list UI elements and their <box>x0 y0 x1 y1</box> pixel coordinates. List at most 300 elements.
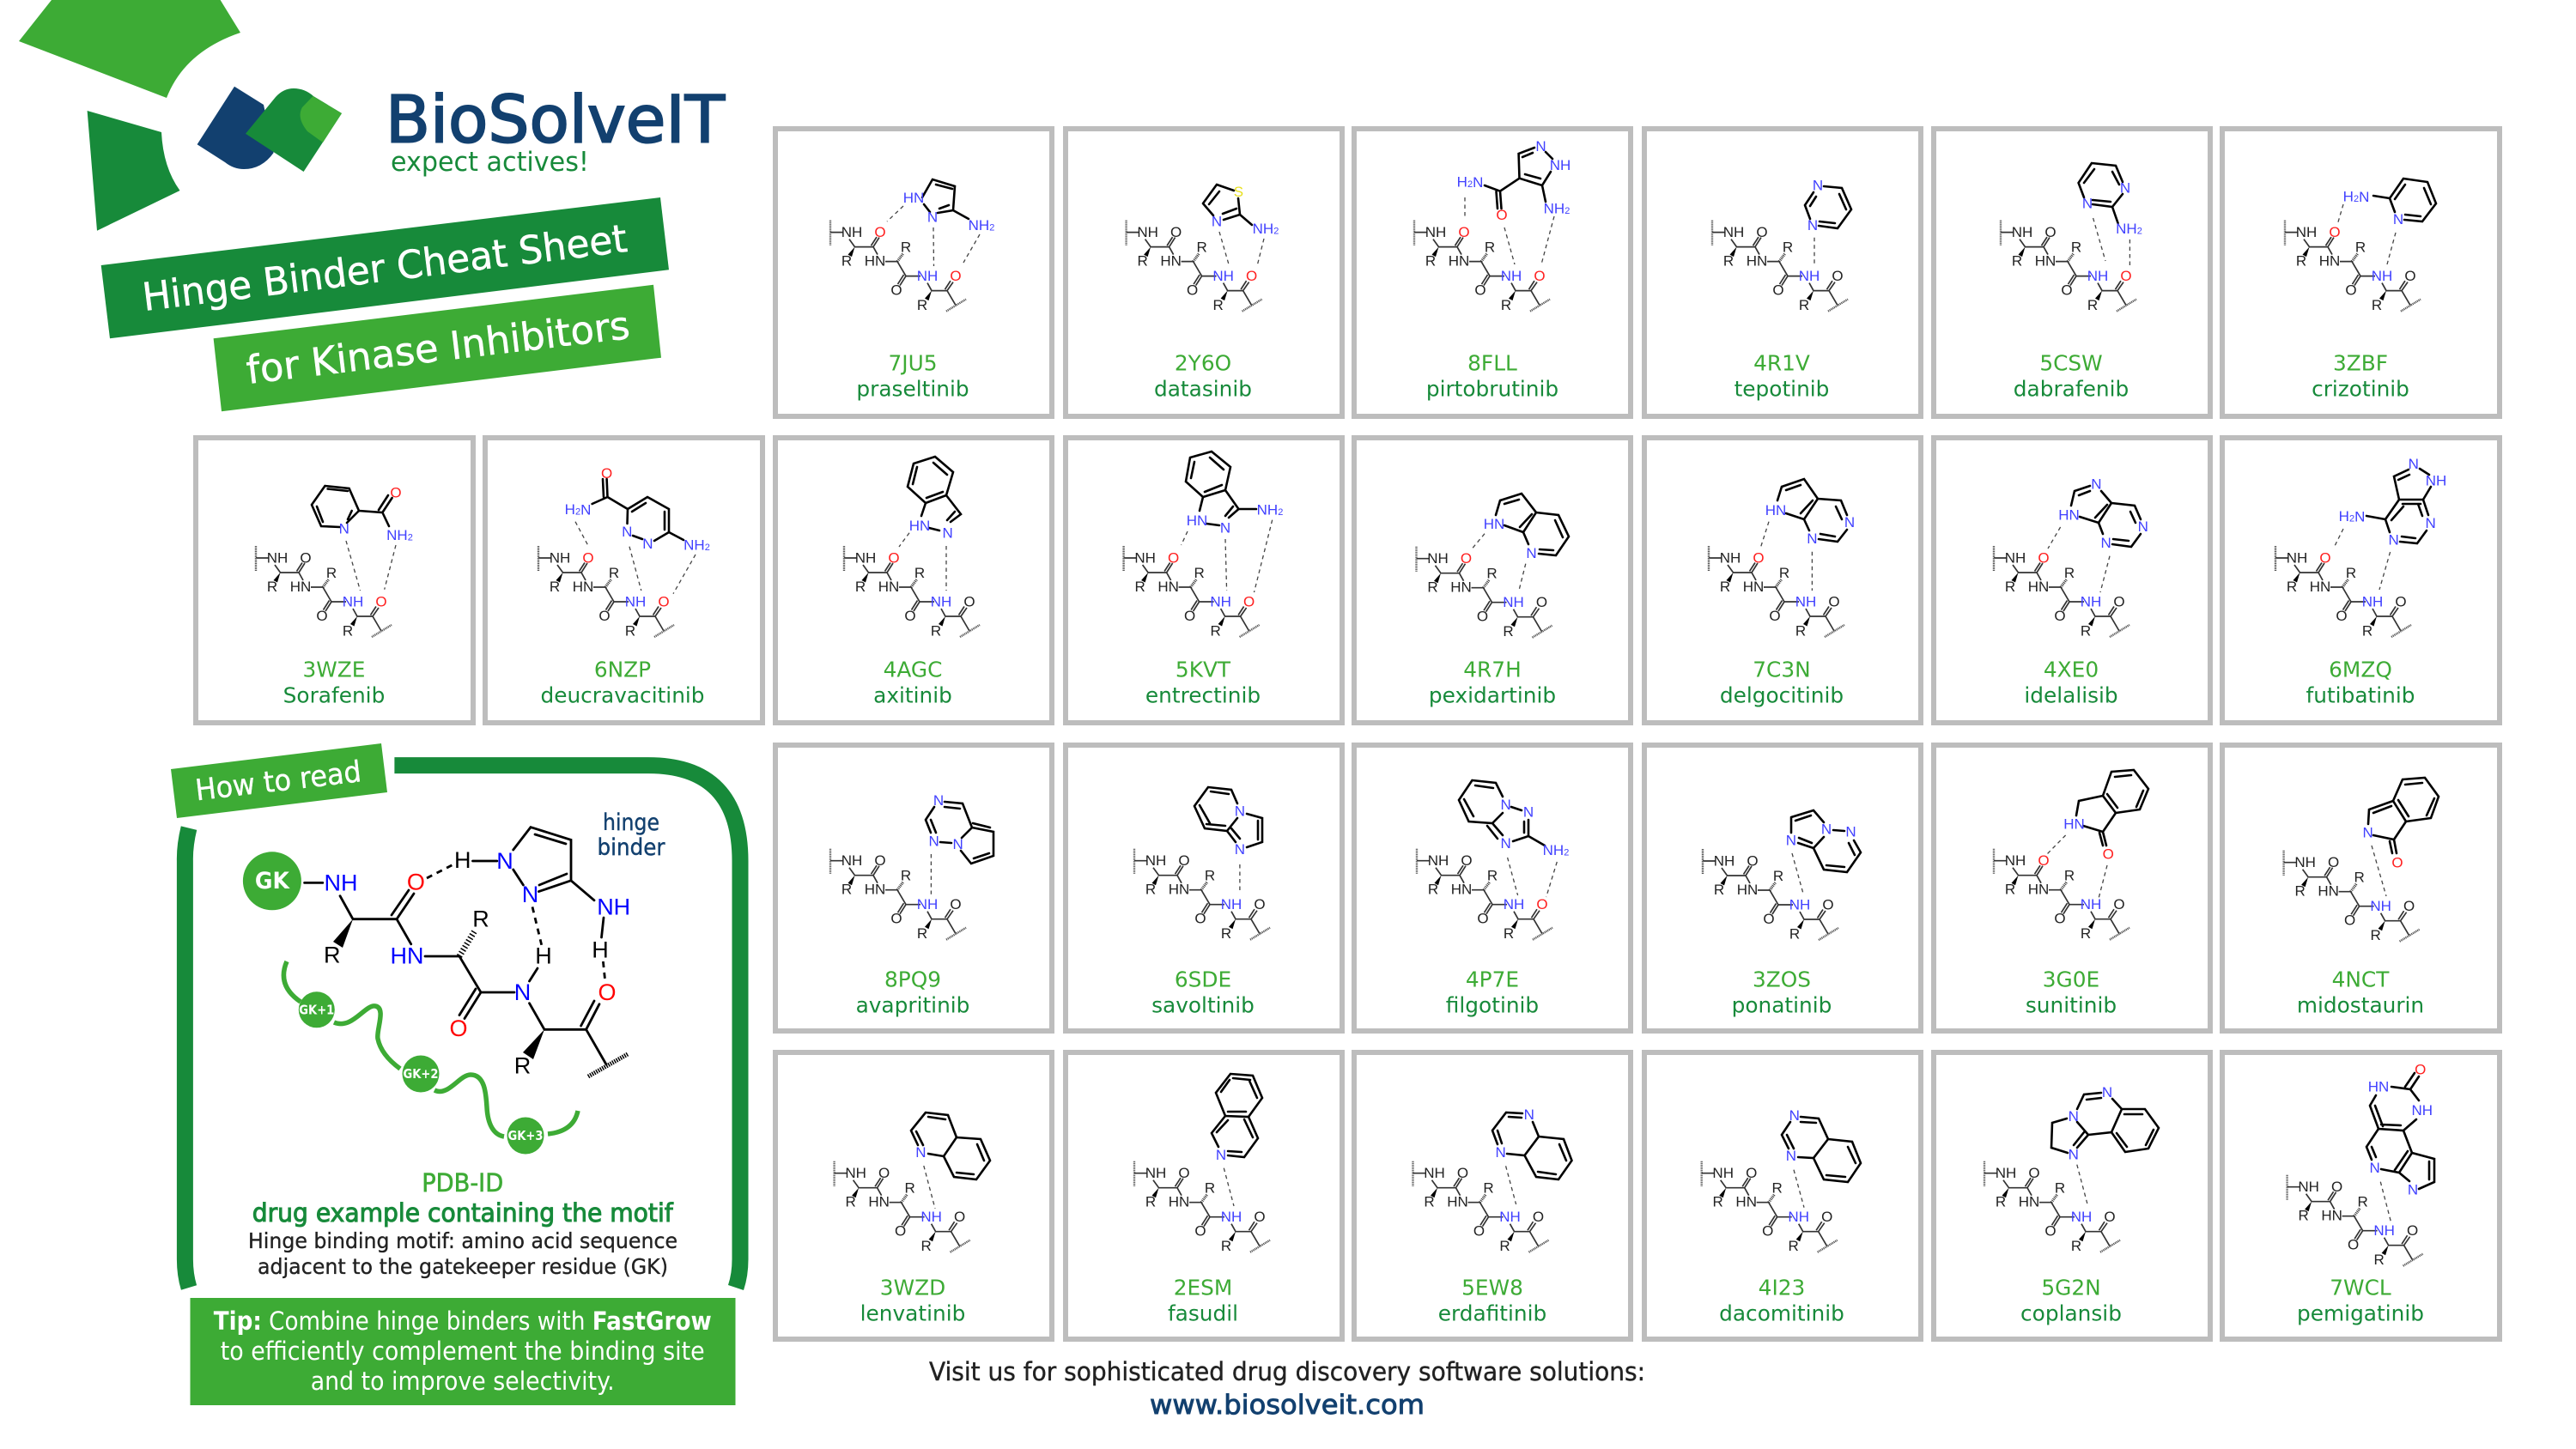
chemical structure: R <box>1996 1194 2006 1210</box>
chemical structure: R <box>609 565 619 581</box>
chemical structure: O <box>2331 1179 2342 1195</box>
chemical structure: R <box>1483 1180 1494 1197</box>
title banner: Hinge Binder Cheat Sheet: Hinge Binder Cheat Sheet <box>140 215 629 320</box>
chemical structure: H <box>2339 508 2349 524</box>
chart: binding motif chemical structure: R <box>324 943 340 968</box>
chemical structure: NH <box>1723 224 1744 240</box>
chemical structure: O <box>598 608 611 624</box>
chemical structure: HN <box>2310 579 2330 595</box>
chemical structure: O <box>1243 594 1255 609</box>
chemical structure: O <box>890 282 902 299</box>
chemical structure: O <box>2319 549 2331 567</box>
chemical structure: O <box>954 1209 965 1225</box>
label: PDB ID: 8PQ9 <box>884 967 941 991</box>
chemical structure: O <box>1178 852 1190 869</box>
chemical structure <box>844 457 980 639</box>
chemical structure: O <box>2329 224 2341 240</box>
label: PDB ID: 3WZE <box>303 657 365 682</box>
panel: 5EW8 erdafitinib <box>1354 1052 1631 1339</box>
label: PDB ID: 5EW8 <box>1461 1275 1523 1300</box>
label: drug name: delgocitinib <box>1720 682 1844 707</box>
chemical structure: O <box>950 896 962 912</box>
chemical structure: NH <box>1425 224 1446 240</box>
label: drug name: dabrafenib <box>2014 377 2129 402</box>
chemical structure: HN <box>1187 512 1207 529</box>
panel: 7JU5 praseltinib <box>775 129 1052 416</box>
chemical structure: R <box>1145 882 1156 898</box>
chemical structure: NH <box>2373 1222 2395 1239</box>
chart: residue chain GK+1 to GK+3: GK+3 <box>508 1128 543 1143</box>
chemical structure: O <box>2407 1222 2418 1239</box>
chemical structure: N <box>1524 1106 1534 1123</box>
chemical structure: NH <box>1550 157 1571 173</box>
chemical structure: N <box>1821 821 1832 838</box>
chemical structure: R <box>1210 623 1221 639</box>
icon: gatekeeper residue GK <box>243 852 301 910</box>
chemical structure: O <box>2415 1061 2426 1078</box>
text block: motif definition: adjacent to the gatekeeper residue (GK) <box>258 1254 668 1279</box>
chemical structure: O <box>1753 549 1765 567</box>
label: drug name: pemigatinib <box>2297 1300 2424 1325</box>
panel: 7C3N delgocitinib <box>1644 438 1921 723</box>
chemical structure: O <box>1254 1209 1266 1225</box>
chemical structure: NH <box>2298 1179 2319 1195</box>
label: PDB ID: 4I23 <box>1759 1275 1805 1300</box>
chemical structure: NH <box>1427 550 1449 567</box>
chemical structure: R <box>1504 925 1514 942</box>
chemical structure: O <box>1474 282 1486 299</box>
chemical structure <box>2285 179 2436 313</box>
label: hinge binder: hinge <box>603 809 659 836</box>
chemical structure: H <box>2343 189 2354 204</box>
chemical structure: NH <box>920 1209 942 1225</box>
chemical structure <box>1702 1107 1861 1254</box>
label: PDB ID: 4P7E <box>1466 967 1519 991</box>
chemical structure: O <box>1828 594 1840 609</box>
chemical structure: O <box>2404 268 2416 284</box>
chart: binding motif chemical structure: O <box>407 869 425 894</box>
chemical structure: O <box>1254 896 1266 912</box>
title banner: Hinge Binder Cheat Sheet <box>101 197 669 338</box>
chemical structure: NH <box>969 217 989 233</box>
chart: binding motif chemical structure <box>305 828 630 1079</box>
chemical structure: R <box>1427 579 1438 596</box>
heading: how to read <box>171 743 387 818</box>
chemical structure: O <box>1821 1209 1832 1225</box>
chemical structure: O <box>1194 911 1206 927</box>
chemical structure: N <box>2393 211 2403 227</box>
chemical structure: NH <box>2287 549 2307 567</box>
chart: binding motif chemical structure: R <box>472 906 489 932</box>
chemical structure: N <box>1235 841 1245 858</box>
chemical structure: N <box>1786 833 1796 848</box>
panel: 3ZBF crizotinib <box>2222 129 2500 416</box>
chemical structure: 2 <box>1273 227 1279 237</box>
chemical structure: NH <box>2012 224 2032 240</box>
chemical structure: O <box>2044 224 2057 240</box>
chemical structure <box>1417 780 1569 942</box>
chart: binding motif chemical structure: NH <box>325 870 357 895</box>
panel: 3WZE Sorafenib <box>196 438 473 723</box>
chart: residue chain GK+1 to GK+3 <box>283 961 578 1154</box>
legend text: PDB-ID: PDB-ID <box>422 1168 503 1197</box>
chemical structure: O <box>895 1223 906 1240</box>
chemical structure: O <box>300 549 312 567</box>
logo wordmark: BioSolveIT <box>386 82 726 158</box>
callout: tip: Tip: Combine hinge binders with FastGrow <box>214 1307 712 1336</box>
chemical structure: S <box>1234 184 1243 200</box>
chemical structure: R <box>2370 927 2381 943</box>
label: drug name: datasinib <box>1154 377 1252 402</box>
chart: residue chain GK+1 to GK+3: GK+1 <box>299 1002 334 1017</box>
chemical structure: O <box>2028 1165 2040 1181</box>
chemical structure: HN <box>1449 253 1469 270</box>
chemical structure: HN <box>868 1194 890 1210</box>
chemical structure: NH <box>1795 594 1816 609</box>
chemical structure: NH <box>550 549 570 567</box>
chemical structure: N <box>1216 1147 1226 1163</box>
chemical structure: O <box>1747 853 1759 869</box>
chemical structure: O <box>2113 896 2125 912</box>
chemical structure: HN <box>2318 883 2339 900</box>
chemical structure: R <box>2354 870 2365 886</box>
panel: 4AGC axitinib <box>775 438 1052 723</box>
chemical structure: O <box>1457 1165 1468 1181</box>
label: drug name: Sorafenib <box>283 682 385 707</box>
chemical structure: HN <box>2321 1208 2342 1224</box>
chemical structure <box>830 792 993 942</box>
panel: 4I23 dacomitinib <box>1644 1052 1921 1339</box>
chart: binding motif chemical structure: N <box>522 882 538 907</box>
chemical structure: R <box>2373 1252 2385 1268</box>
chemical structure: R <box>2064 565 2075 581</box>
chemical structure <box>1984 1084 2159 1254</box>
chemical structure: N <box>2069 1108 2079 1125</box>
chemical structure: HN <box>1737 882 1758 898</box>
label: drug name: tepotinib <box>1735 377 1829 402</box>
chemical structure: O <box>2348 1237 2359 1253</box>
chemical structure: O <box>2345 282 2357 299</box>
chemical structure: NH <box>267 549 288 567</box>
chemical structure: HN <box>2368 1078 2389 1095</box>
chemical structure <box>1127 184 1279 313</box>
panel: 3ZOS ponatinib <box>1644 745 1921 1031</box>
panel: 3G0E sunitinib <box>1934 745 2210 1031</box>
chemical structure: NH <box>1720 549 1741 567</box>
chemical structure: N <box>1807 530 1818 547</box>
chemical structure: O <box>1763 911 1775 927</box>
panel: 7WCL pemigatinib <box>2222 1052 2500 1339</box>
label: hinge binder <box>598 809 665 861</box>
chemical structure: O <box>874 852 886 869</box>
chemical structure: N <box>2370 1160 2380 1176</box>
chemical structure: O <box>888 549 900 567</box>
chemical structure: O <box>2113 594 2125 609</box>
chart: binding motif chemical structure: N <box>496 848 513 874</box>
chemical structure <box>1709 479 1855 639</box>
chemical structure: NH <box>1544 201 1564 216</box>
chemical structure: R <box>1487 868 1498 884</box>
chemical structure: O <box>375 594 387 609</box>
label: drug name: pirtobrutinib <box>1426 377 1558 402</box>
chemical structure: NH <box>1212 268 1234 284</box>
chemical structure: R <box>904 1180 915 1197</box>
panel: 4R7H pexidartinib <box>1354 438 1631 723</box>
chemical structure: N <box>2409 456 2419 472</box>
chemical structure: O <box>1168 549 1179 567</box>
chemical structure <box>2287 1061 2434 1268</box>
chemical structure: NH <box>1221 896 1242 912</box>
chemical structure: N <box>2101 535 2111 551</box>
chart: binding motif chemical structure: O <box>598 979 617 1005</box>
chemical structure: NH <box>1714 853 1735 869</box>
chemical structure: O <box>2120 268 2132 284</box>
chemical structure: R <box>917 925 927 942</box>
panel: 5G2N coplansib <box>1934 1052 2210 1339</box>
chemical structure: HN <box>2035 253 2056 270</box>
chemical structure: HN <box>865 253 885 270</box>
chemical structure: R <box>550 579 560 595</box>
panel: 8PQ9 avapritinib <box>775 745 1052 1031</box>
label: PDB ID: 7WCL <box>2330 1275 2391 1300</box>
chemical structure: NH <box>1210 594 1231 609</box>
chemical structure: R <box>1196 239 1207 256</box>
chemical structure: NH <box>1134 549 1156 567</box>
label: PDB ID: 4XE0 <box>2044 657 2099 682</box>
chemical structure: 2 <box>2354 194 2359 204</box>
label: drug name: ponatinib <box>1732 992 1832 1017</box>
label: PDB ID: 4R7H <box>1463 657 1522 682</box>
chemical structure: 2 <box>2137 227 2142 237</box>
chemical structure: N <box>2354 508 2365 524</box>
chemical structure: HN <box>909 518 930 534</box>
panel: 4P7E filgotinib <box>1354 745 1631 1031</box>
chemical structure: O <box>1473 1223 1485 1240</box>
chemical structure: O <box>2054 608 2066 624</box>
chemical structure: HN <box>1484 516 1504 532</box>
chemical structure: NH <box>917 268 938 284</box>
chemical structure: NH <box>2005 549 2026 567</box>
title banner: for Kinase Inhibitors: for Kinase Inhibitors <box>244 302 632 393</box>
chemical structure: R <box>2346 565 2356 581</box>
chemical structure: R <box>1134 579 1145 595</box>
heading: how to read: How to read <box>193 755 363 808</box>
chemical structure: R <box>2355 239 2366 256</box>
chemical structure: NH <box>1253 221 1273 237</box>
chemical structure: N <box>580 501 591 518</box>
chemical structure: N <box>2091 476 2102 493</box>
chemical structure: R <box>917 297 927 313</box>
chemical structure: 2 <box>705 543 710 553</box>
chart: binding motif chemical structure: N <box>514 979 531 1005</box>
icon: BioSolveIT logo mark <box>197 87 342 172</box>
chemical structure: O <box>2061 282 2073 299</box>
chemical structure: R <box>326 565 337 581</box>
chemical structure: O <box>601 465 612 482</box>
chemical structure: N <box>2102 1084 2112 1100</box>
chemical structure: R <box>2287 579 2297 595</box>
chemical structure: O <box>1461 550 1472 567</box>
chemical structure: O <box>1746 1165 1757 1181</box>
chemical structure <box>1417 494 1569 640</box>
chart: residue chain GK+1 to GK+3: GK+2 <box>404 1066 438 1082</box>
chemical structure: O <box>1762 1223 1773 1240</box>
chemical structure: NH <box>1257 501 1278 518</box>
icon: gatekeeper residue GK: GK <box>255 868 290 894</box>
chemical structure <box>1994 476 2148 639</box>
label: drug name: idelalisib <box>2024 682 2118 707</box>
chemical structure: NH <box>1137 224 1158 240</box>
chemical structure: H <box>1457 173 1467 191</box>
label: drug name: deucravacitinib <box>540 682 705 707</box>
panel: 5KVT entrectinib <box>1066 438 1342 723</box>
label: PDB ID: 2Y6O <box>1175 351 1231 376</box>
chemical structure: N <box>1807 217 1818 233</box>
chemical structure: NH <box>1424 1165 1445 1181</box>
chart: binding motif chemical structure: O <box>449 1016 468 1041</box>
chemical structure: R <box>2296 253 2306 270</box>
chemical structure: N <box>942 525 953 541</box>
chemical structure: N <box>952 836 963 852</box>
chemical structure <box>1134 1074 1270 1254</box>
chemical structure: R <box>841 253 852 270</box>
label: PDB ID: 4NCT <box>2332 967 2390 991</box>
label: drug name: crizotinib <box>2312 377 2409 402</box>
chemical structure: N <box>1220 520 1230 536</box>
chemical structure: O <box>1536 594 1547 610</box>
chemical structure: NH <box>2116 221 2137 237</box>
chemical structure: O <box>1534 268 1546 284</box>
chemical structure: R <box>1425 253 1436 270</box>
chemical structure: R <box>2081 623 2091 639</box>
chemical structure: HN <box>1160 253 1182 270</box>
chemical structure: R <box>2071 1238 2081 1254</box>
chemical structure: R <box>1503 623 1514 640</box>
chemical structure: HN <box>865 882 885 898</box>
panel: 2Y6O datasinib <box>1066 129 1342 416</box>
panel: 4NCT midostaurin <box>2222 745 2500 1031</box>
chemical structure: NH <box>1799 268 1820 284</box>
chemical structure: N <box>1845 824 1856 840</box>
panel: 2ESM fasudil <box>1066 1052 1342 1339</box>
chemical structure: R <box>1772 1180 1783 1197</box>
label: PDB ID: 6SDE <box>1175 967 1231 991</box>
label: drug name: dacomitinib <box>1719 1300 1844 1325</box>
chemical structure: R <box>1485 239 1495 256</box>
label: PDB ID: 3ZBF <box>2333 351 2388 376</box>
chemical structure: NH <box>1788 1209 1809 1225</box>
panel: 6NZP deucravacitinib <box>485 438 762 723</box>
chemical structure: O <box>390 484 402 501</box>
chemical structure: O <box>904 608 916 624</box>
label: drug name: entrectinib <box>1145 682 1261 707</box>
chemical structure: NH <box>2372 268 2392 284</box>
chemical structure: N <box>1535 138 1546 155</box>
chemical structure: O <box>2391 855 2403 870</box>
chemical structure: O <box>1194 1223 1206 1240</box>
chart: binding motif chemical structure: R <box>514 1053 531 1079</box>
chemical structure: NH <box>1145 1165 1166 1181</box>
chemical structure: O <box>1184 608 1195 624</box>
label: PDB ID: 4AGC <box>884 657 942 682</box>
chemical structure: O <box>582 549 594 567</box>
chemical structure: O <box>1769 608 1781 624</box>
panel: 6SDE savoltinib <box>1066 745 1342 1031</box>
chemical structure: NH <box>2426 472 2446 489</box>
chemical structure: O <box>2044 1223 2057 1240</box>
label: PDB ID: 5KVT <box>1176 657 1231 682</box>
chemical structure: O <box>2054 911 2066 927</box>
chemical structure: R <box>1486 566 1498 582</box>
chemical structure: R <box>920 1238 932 1254</box>
chemical structure: N <box>915 1144 927 1161</box>
chemical structure: HN <box>2058 506 2080 524</box>
chemical structure: N <box>927 209 938 225</box>
chemical structure: NH <box>1712 1165 1734 1181</box>
chemical structure: R <box>1773 868 1783 884</box>
chart: binding motif chemical structure: H <box>454 847 471 873</box>
chemical structure: N <box>1844 514 1855 530</box>
chemical structure: NH <box>1503 594 1524 610</box>
chemical structure <box>1134 787 1270 942</box>
chemical structure: R <box>1783 239 1793 256</box>
chemical structure: N <box>1500 797 1511 813</box>
chemical structure: R <box>1205 868 1215 884</box>
label: drug name: fasudil <box>1168 1300 1238 1325</box>
label: drug name: praseltinib <box>856 377 969 402</box>
chemical structure: N <box>929 833 939 850</box>
label: PDB ID: 5CSW <box>2039 351 2103 376</box>
label: drug name: sunitinib <box>2026 992 2117 1017</box>
label: drug name: midostaurin <box>2297 992 2424 1017</box>
chemical structure: R <box>343 623 353 639</box>
chemical structure: R <box>1713 1194 1723 1210</box>
chemical structure: N <box>1235 803 1245 819</box>
chemical structure: NH <box>2081 594 2101 609</box>
chemical structure: O <box>2038 549 2050 567</box>
chemical structure: R <box>1221 1238 1231 1254</box>
label: drug name: lenvatinib <box>860 1300 965 1325</box>
chemical structure: HN <box>1169 882 1189 898</box>
chemical structure: HN <box>1450 579 1472 596</box>
label: PDB ID: 2ESM <box>1174 1275 1232 1300</box>
panel: 6MZQ futibatinib <box>2222 438 2500 723</box>
chemical structure: O <box>874 224 886 240</box>
chemical structure: R <box>1145 1194 1156 1210</box>
label: drug name: erdafitinib <box>1438 1300 1546 1325</box>
chemical structure: N <box>2120 180 2130 196</box>
chemical structure: O <box>2344 912 2355 929</box>
chemical structure: R <box>901 239 911 256</box>
chemical structure: O <box>1178 1165 1190 1181</box>
label: PDB ID: 4R1V <box>1753 351 1810 376</box>
chemical structure: NH <box>2071 1209 2092 1225</box>
chemical structure: H <box>565 501 575 518</box>
chemical structure: NH <box>845 1165 866 1181</box>
chemical structure: HN <box>2319 253 2340 270</box>
chemical structure: O <box>1170 224 1182 240</box>
chemical structure: N <box>2426 515 2436 531</box>
label: PDB ID: 6NZP <box>594 657 651 682</box>
chemical structure: HN <box>878 579 899 595</box>
chemical structure: N <box>1813 177 1823 194</box>
panel: 3WZD lenvatinib <box>775 1052 1052 1339</box>
chemical structure: HN <box>2028 882 2049 898</box>
chemical structure: N <box>933 792 944 809</box>
chemical structure: R <box>1789 1238 1799 1254</box>
chemical structure: O <box>2403 898 2415 914</box>
footer text: visit us: Visit us for sophisticated drug discovery software solutions: <box>929 1357 1645 1386</box>
